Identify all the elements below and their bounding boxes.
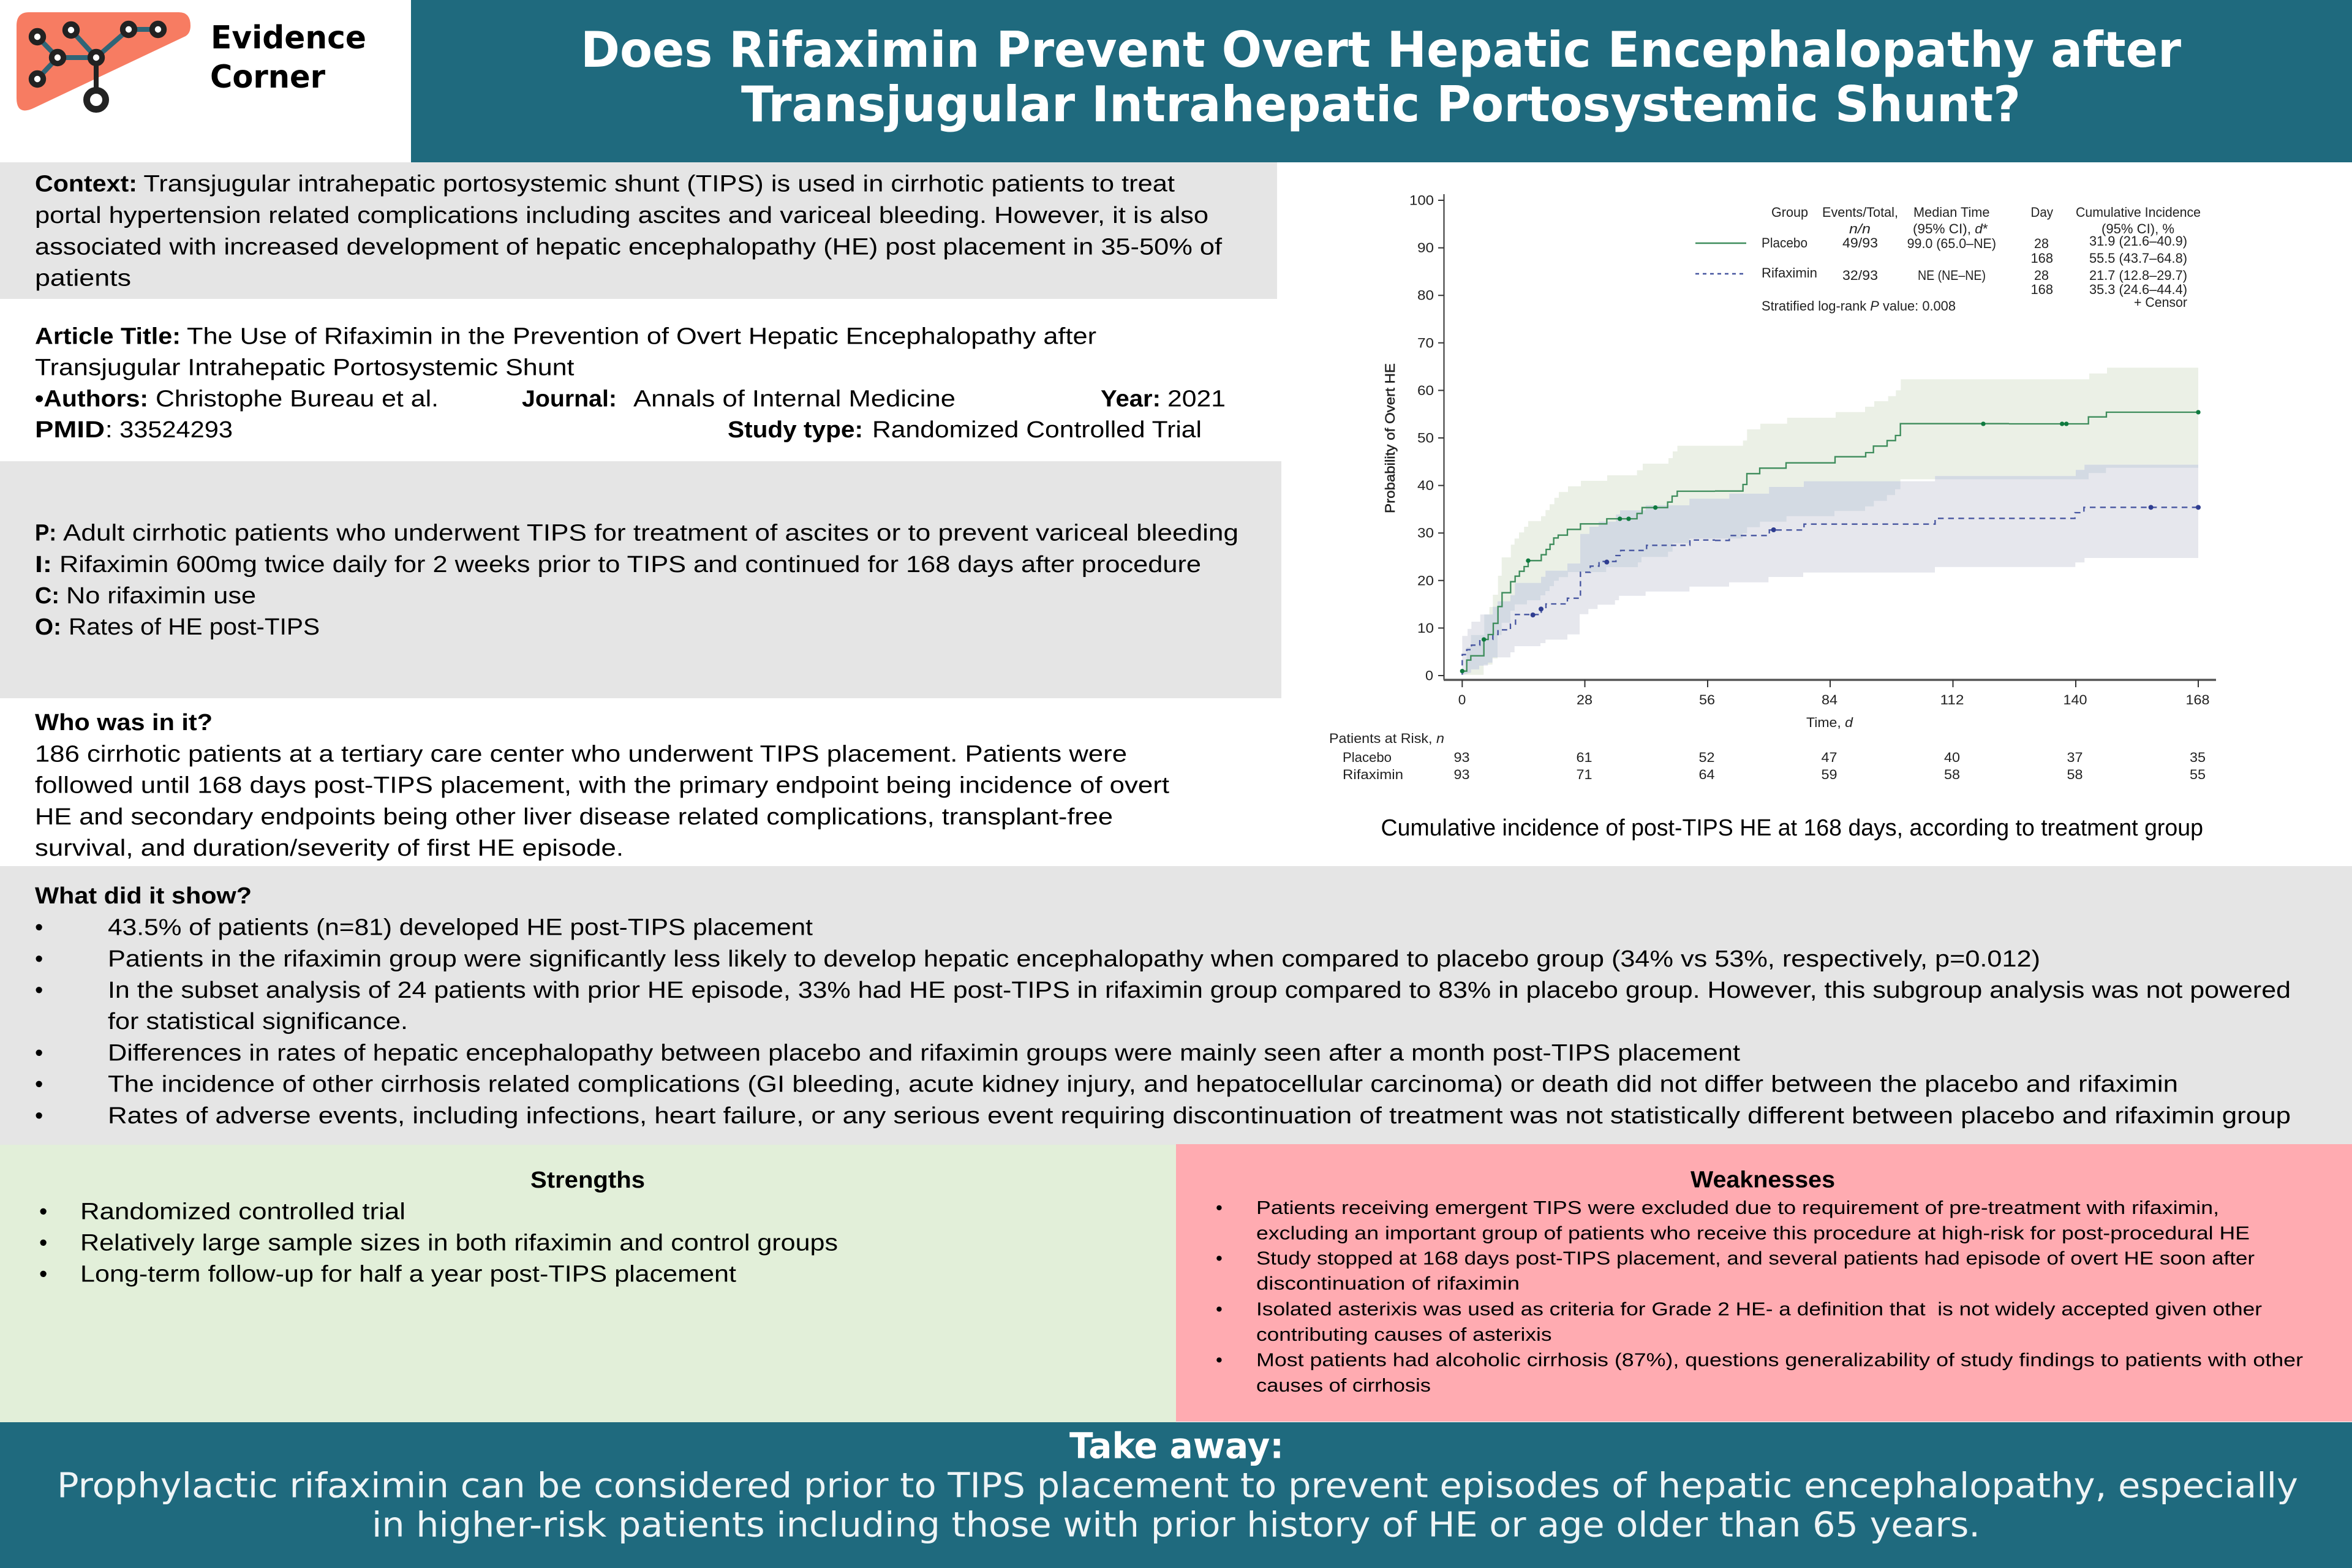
panel: weaknesses: contributing causes of asterixis [1256, 1324, 1552, 1345]
chart legend: 31.9 (21.6–40.9) [2089, 233, 2187, 249]
y axis: Probability of Overt HE [1382, 363, 1398, 513]
patients at risk table: 59 [1822, 767, 1838, 782]
panel: weaknesses: Isolated asterixis was used as criteria for Grade 2 HE- a definition that is not widely accepted given other [1256, 1298, 2262, 1320]
panel: take away [0, 1422, 2352, 1568]
panel: strengths: • [39, 1231, 47, 1256]
panel: what did it show: • [35, 915, 43, 941]
panel: strengths: Relatively large sample sizes in both rifaximin and control groups [80, 1231, 838, 1256]
panel: article details: 2021 [1167, 386, 1226, 412]
patients at risk table: 37 [2067, 750, 2082, 765]
take away message: in higher-risk patients including those with prior history of HE or age older than 65 years. [372, 1505, 1980, 1545]
panel: weaknesses: Study stopped at 168 days post-TIPS placement, and several patients had episode of overt HE soon after [1256, 1247, 2255, 1268]
panel: what did it show: Rates of adverse events, including infections, heart failure, or any serious event requiring discontinuation of treatment was not statistically different between placebo and rifaximin group [108, 1103, 2291, 1129]
patients at risk table: 64 [1699, 767, 1715, 782]
panel: article details: Randomized Controlled Trial [872, 417, 1202, 443]
panel: what did it show [0, 866, 2352, 1145]
chart legend: 21.7 (12.8–29.7) [2089, 268, 2187, 283]
heading: take away: Take away: [1069, 1425, 1284, 1467]
panel: weaknesses: excluding an important group of patients who receive this procedure at high-risk for post-procedural HE [1256, 1222, 2250, 1243]
x axis: 84 [1822, 692, 1838, 707]
panel: who was in it: HE and secondary endpoints being other liver disease related complications, transplant-free [35, 804, 1113, 830]
patients at risk table: 58 [1944, 767, 1960, 782]
take away message: Prophylactic rifaximin can be considered prior to TIPS placement to prevent episodes of hepatic encephalopathy, especially [57, 1466, 2298, 1506]
panel: what did it show: Differences in rates of hepatic encephalopathy between placebo and rifaximin groups were mainly seen after a month post-TIPS placement [108, 1041, 1740, 1066]
y axis: 80 [1417, 288, 1434, 303]
panel: what did it show: • [35, 946, 43, 972]
patients at risk table: 55 [2190, 767, 2206, 782]
panel: what did it show: • [35, 1072, 43, 1098]
y axis: 40 [1417, 478, 1434, 493]
chart caption: Cumulative incidence of post-TIPS HE at 168 days, according to treatment group [1381, 815, 2203, 841]
chart legend: Group [1771, 205, 1808, 220]
x axis: 112 [1940, 692, 1964, 707]
chart legend: Stratified log-rank P value: 0.008 [1762, 298, 1956, 314]
panel: weaknesses: • [1216, 1247, 1223, 1268]
panel: strengths: Randomized controlled trial [80, 1199, 405, 1225]
chart legend: Rifaximin [1762, 265, 1817, 281]
y axis: 70 [1417, 335, 1434, 350]
patients at risk table: 71 [1577, 767, 1593, 782]
y axis: 50 [1417, 430, 1434, 446]
panel: weaknesses: discontinuation of rifaximin [1256, 1273, 1520, 1294]
panel: weaknesses: Most patients had alcoholic cirrhosis (87%), questions generalizability of study findings to patients with other [1256, 1349, 2303, 1371]
panel: weaknesses: causes of cirrhosis [1256, 1374, 1431, 1396]
panel: article details: PMID [35, 417, 105, 443]
chart legend: 55.5 (43.7–64.8) [2089, 251, 2187, 266]
y axis [1382, 192, 1444, 684]
patients at risk table: 93 [1454, 767, 1470, 782]
panel: context: Context: [35, 172, 137, 197]
chart legend: 99.0 (65.0–NE) [1907, 236, 1996, 251]
x axis: 56 [1699, 692, 1715, 707]
panel: what did it show: Patients in the rifaximin group were significantly less likely to develop hepatic encephalopathy when compared to placebo group (34% vs 53%, respectively, p=0.012) [108, 946, 2040, 972]
patients at risk table [1329, 731, 2206, 782]
patients at risk table: 61 [1577, 750, 1593, 765]
heading: weaknesses: Weaknesses [1691, 1167, 1835, 1193]
curve: rifaximin [1462, 505, 2201, 675]
patients at risk table: 93 [1454, 750, 1470, 765]
panel: weaknesses: Patients receiving emergent TIPS were excluded due to requirement of pre-treatment with rifaximin, [1256, 1197, 2219, 1218]
panel: what did it show: for statistical significance. [108, 1009, 408, 1035]
patients at risk table: Patients at Risk, n [1329, 731, 1444, 746]
title [581, 21, 2182, 133]
y axis: 0 [1425, 668, 1433, 684]
x axis [1444, 680, 2216, 730]
panel: who was in it [35, 710, 1170, 861]
panel: who was in it: Who was in it? [35, 710, 213, 736]
chart legend [1695, 205, 2201, 314]
y axis: 90 [1417, 240, 1434, 255]
chart legend: 32/93 [1842, 268, 1878, 283]
chart legend: 35.3 (24.6–44.4) [2089, 282, 2187, 297]
x axis: 0 [1458, 692, 1466, 707]
panel: article details: Journal: [522, 386, 617, 412]
panel: what did it show: What did it show? [35, 883, 252, 909]
panel: PICO: Rates of HE post-TIPS [69, 614, 320, 640]
confidence band overlap [1462, 465, 2198, 675]
panel: PICO [0, 461, 1281, 698]
y axis: 10 [1417, 620, 1434, 636]
panel: article details: Annals of Internal Medicine [633, 386, 956, 412]
panel: article details: : 33524293 [105, 417, 233, 443]
confidence band: placebo [1462, 368, 2198, 675]
panel: weaknesses: • [1216, 1197, 1223, 1218]
chart legend: Median Time [1913, 205, 1989, 220]
title: Transjugular Intrahepatic Portosystemic Shunt? [741, 76, 2021, 133]
take away message [57, 1466, 2298, 1545]
panel: article details [35, 324, 1226, 443]
panel: context [0, 162, 1277, 299]
panel: strengths: Long-term follow-up for half a year post-TIPS placement [80, 1262, 736, 1287]
patients at risk table: 35 [2190, 750, 2206, 765]
chart legend: Day [2031, 205, 2054, 220]
logo wordmark [210, 20, 366, 96]
panel: what did it show: 43.5% of patients (n=81) developed HE post-TIPS placement [108, 915, 813, 941]
panel: article details: Article Title: [35, 324, 181, 350]
chart legend: Cumulative Incidence [2076, 205, 2201, 220]
panel: weaknesses: • [1216, 1349, 1223, 1371]
y axis: 30 [1417, 526, 1434, 541]
panel: PICO: Adult cirrhotic patients who underwent TIPS for treatment of ascites or to prevent variceal bleeding [63, 521, 1238, 546]
x axis: 168 [2185, 692, 2210, 707]
chart legend: (95% CI), % [2101, 221, 2174, 236]
chart legend: (95% CI), d* [1913, 221, 1988, 236]
chart legend: + Censor [2134, 295, 2187, 310]
panel: article details: •Authors: [35, 386, 148, 412]
panel: context: associated with increased development of hepatic encephalopathy (HE) post placement in 35-50% of [35, 234, 1222, 260]
panel: strengths [0, 1145, 1176, 1422]
title: Does Rifaximin Prevent Overt Hepatic Encephalopathy after [581, 21, 2182, 78]
chart legend: Events/Total, [1822, 205, 1898, 220]
chart legend: 28 [2034, 236, 2049, 251]
title banner [411, 0, 2352, 162]
logo: Evidence Corner [17, 12, 366, 110]
patients at risk table: Placebo [1343, 750, 1392, 765]
panel: PICO: No rifaximin use [66, 583, 256, 609]
panel: PICO: O: [35, 614, 61, 640]
panel: who was in it: 186 cirrhotic patients at a tertiary care center who underwent TIPS placement. Patients were [35, 741, 1127, 767]
panel: strengths: • [39, 1262, 47, 1287]
patients at risk table: 47 [1822, 750, 1838, 765]
panel: who was in it: survival, and duration/severity of first HE episode. [35, 835, 624, 861]
panel: PICO: C: [35, 583, 59, 609]
patients at risk table: 52 [1699, 750, 1715, 765]
patients at risk table: 40 [1944, 750, 1960, 765]
heading: strengths: Strengths [530, 1167, 645, 1193]
panel: weaknesses: • [1216, 1298, 1223, 1320]
panel: PICO: P: [35, 521, 56, 546]
panel: what did it show: • [35, 1041, 43, 1066]
panel: what did it show: In the subset analysis of 24 patients with prior HE episode, 33% had HE post-TIPS in rifaximin group compared to 83% in placebo group. However, this subgroup analysis was not powered [108, 978, 2291, 1003]
chart legend: 28 [2034, 268, 2049, 283]
panel: what did it show: • [35, 1103, 43, 1129]
y axis: 20 [1417, 573, 1434, 588]
panel: what did it show: • [35, 978, 43, 1003]
panel: context: Transjugular intrahepatic portosystemic shunt (TIPS) is used in cirrhotic patients to treat [143, 172, 1175, 197]
panel: article details: Year: [1101, 386, 1161, 412]
patients at risk table: 58 [2067, 767, 2082, 782]
curve: placebo [1460, 410, 2201, 673]
logo wordmark: Corner [210, 59, 325, 96]
x axis: 28 [1577, 692, 1593, 707]
panel: context: patients [35, 266, 131, 292]
confidence band: rifaximin [1462, 465, 2198, 675]
panel: PICO: I: [35, 552, 52, 578]
chart: cumulative incidence of post-TIPS HE [1329, 192, 2216, 782]
logo wordmark: Evidence [211, 20, 366, 56]
panel: article details: The Use of Rifaximin in the Prevention of Overt Hepatic Encephalopathy after [187, 324, 1096, 350]
panel: who was in it: followed until 168 days post-TIPS placement, with the primary endpoint being incidence of overt [35, 773, 1170, 799]
panel: article details: Christophe Bureau et al. [156, 386, 439, 412]
chart legend: Placebo [1762, 235, 1807, 251]
icon: liver with portal vein network [17, 12, 190, 110]
patients at risk table: Rifaximin [1343, 767, 1403, 782]
panel: what did it show: The incidence of other cirrhosis related complications (GI bleeding, acute kidney injury, and hepatocellular carcinoma) or death did not differ between the placebo and rifaximin [108, 1072, 2178, 1098]
y axis: 60 [1417, 383, 1434, 398]
chart legend: 49/93 [1842, 235, 1878, 251]
panel: weaknesses [1176, 1144, 2352, 1422]
chart legend: 168 [2031, 251, 2053, 266]
chart legend: NE (NE–NE) [1918, 268, 1986, 283]
panel: PICO: Rifaximin 600mg twice daily for 2 weeks prior to TIPS and continued for 168 days after procedure [59, 552, 1201, 578]
chart legend: 168 [2031, 282, 2053, 297]
x axis: 140 [2063, 692, 2087, 707]
x axis: Time, d [1806, 715, 1854, 730]
panel: context: portal hypertension related complications including ascites and variceal bleeding. However, it is also [35, 203, 1208, 228]
panel: article details: Study type: [728, 417, 863, 443]
y axis: 100 [1409, 192, 1434, 208]
panel: strengths: • [39, 1199, 47, 1225]
panel: article details: Transjugular Intrahepatic Portosystemic Shunt [35, 355, 575, 381]
chart legend: n/n [1849, 221, 1871, 236]
